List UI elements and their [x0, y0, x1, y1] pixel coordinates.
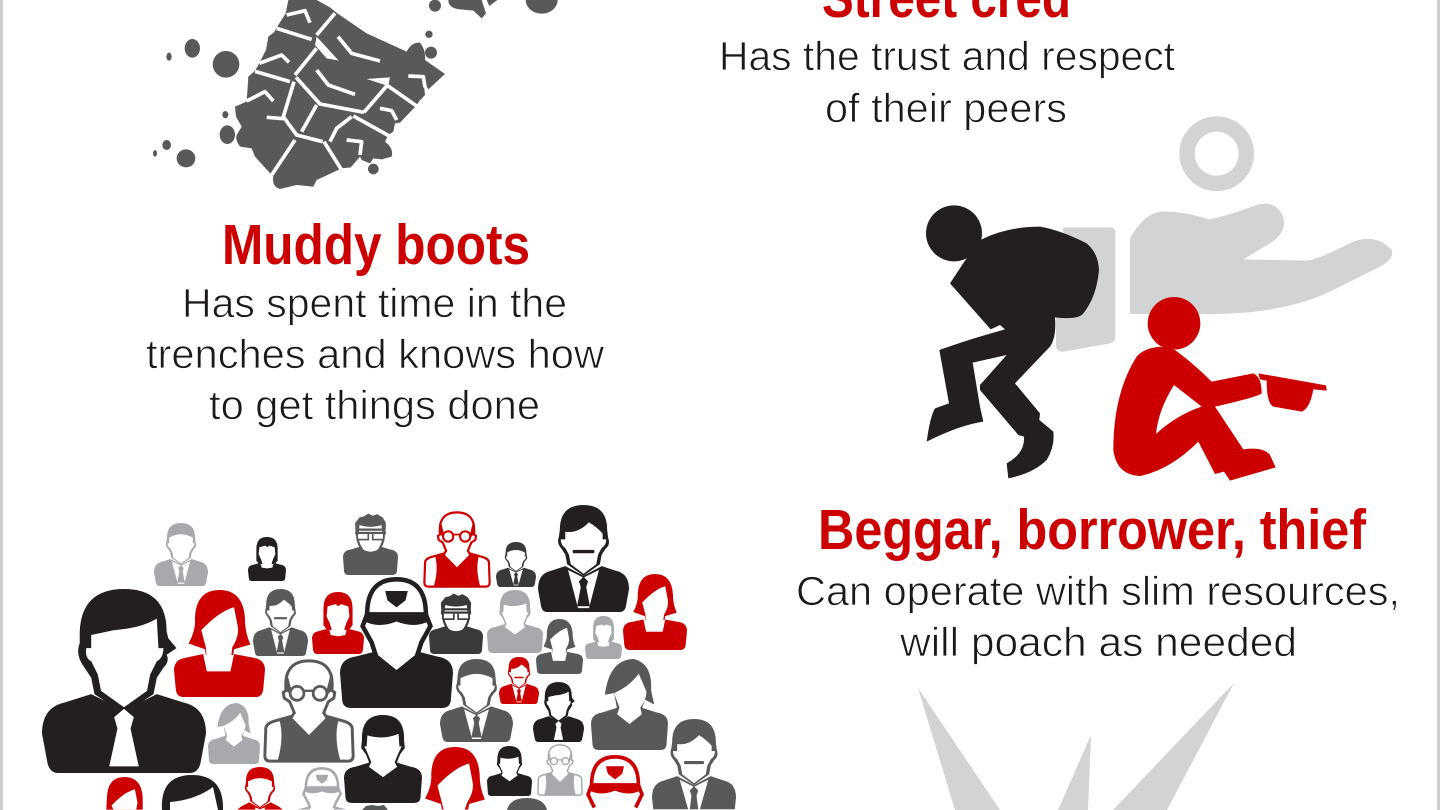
text block: muddy boots description	[146, 280, 604, 428]
text block: beggar description	[796, 568, 1400, 665]
text block: muddy boots description: to get things done	[209, 382, 540, 428]
text block: muddy boots description: trenches and knows how	[146, 331, 604, 377]
text block: street cred description: Has the trust and respect	[719, 33, 1176, 79]
text block: beggar description: Can operate with slim resources,	[796, 568, 1400, 614]
heading: Muddy boots: Muddy boots	[222, 213, 530, 277]
icon: beggar with hat	[1113, 297, 1327, 481]
person: grey emo	[591, 659, 668, 750]
text block: street cred description: of their peers	[825, 85, 1067, 131]
text block: beggar description: will poach as needed	[899, 619, 1297, 665]
person: largest black man with white tie	[42, 589, 206, 773]
person: red woman	[623, 574, 687, 650]
person: red woman bottom left	[106, 777, 143, 810]
icon: beggar, borrower, thief figures	[926, 124, 1392, 481]
person: red woman bottom	[425, 747, 485, 810]
person: grey head bottom centre	[362, 805, 388, 810]
person: large black moustache suit	[538, 505, 629, 612]
person: small red suit	[499, 657, 539, 704]
person: red woman large	[174, 590, 265, 697]
person: grey moustache suit	[253, 589, 308, 656]
person: grey head bottom	[507, 798, 547, 810]
person: small black woman	[248, 537, 286, 581]
person: small black tee	[487, 746, 532, 796]
text block: street cred description	[719, 33, 1176, 131]
person: grey woman	[536, 619, 583, 674]
person: grey suit	[440, 659, 513, 742]
icon: grey hand with ring	[1056, 124, 1392, 352]
person: black tee	[344, 715, 422, 803]
person: grey moustache suit	[652, 719, 736, 809]
person: grey bald	[538, 745, 582, 795]
person: large black cap	[340, 579, 453, 708]
person: small dark suit	[496, 542, 536, 587]
person: small black tie	[533, 682, 584, 742]
person: grey suit	[154, 523, 208, 586]
person: grey tee	[487, 590, 543, 653]
icon: grey burst spikes	[918, 683, 1234, 810]
heading: Beggar, borrower, thief: Beggar, borrower, thief	[818, 498, 1367, 562]
person: red outline suit	[237, 767, 283, 810]
person: grey glasses	[343, 514, 398, 575]
person: red long hair woman	[312, 592, 364, 654]
person: grey bald vest	[265, 661, 353, 761]
person: red cap	[588, 757, 642, 808]
icon: muddy boot print	[153, 0, 558, 189]
person: red bald vest	[424, 512, 490, 587]
person: light grey woman	[585, 616, 622, 659]
people icon cluster	[42, 505, 736, 810]
person: black man bottom left	[162, 775, 223, 810]
person: light grey woman lower	[208, 703, 260, 764]
person: dark glasses	[429, 594, 483, 654]
person: grey cap bottom	[297, 768, 347, 809]
text block: muddy boots description: Has spent time in the	[182, 280, 567, 326]
icon: thief with sack	[926, 205, 1099, 478]
